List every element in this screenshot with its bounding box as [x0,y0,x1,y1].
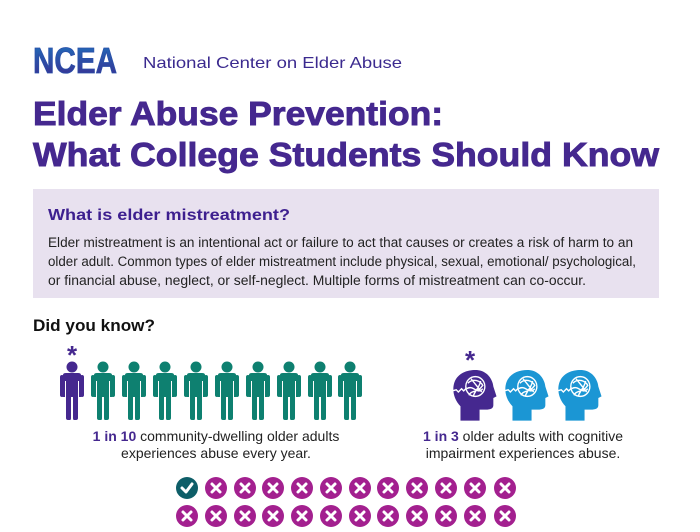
chart: 1 in 10 people icons [60,340,362,420]
logo: NCEA: NCEA [33,40,117,81]
stat text: 1 in 3: 1 in 3 older adults with cognitive [423,428,623,444]
panel: what is elder mistreatment [33,189,659,298]
stat text: 1 in 10: experiences abuse every year. [121,445,311,461]
stat text: 1 in 3: impairment experiences abuse. [426,445,620,461]
stat text: 1 in 10 [93,428,339,461]
organization name: National Center on Elder Abuse [143,55,402,72]
panel heading: What is elder mistreatment? [48,207,290,224]
panel body text: or financial abuse, neglect, or self-neglect. Multiple forms of mistreatment can co-occur. [48,273,586,288]
stat text: 1 in 3 [423,428,623,461]
panel body text: Elder mistreatment is an intentional act or failure to act that causes or creates a risk of harm to an [48,235,633,250]
title: What College Students Should Know [33,136,659,173]
title: Elder Abuse Prevention: [33,95,443,132]
heading: did you know: Did you know? [33,316,155,335]
asterisk: * [67,340,78,370]
asterisk: * [465,345,476,375]
stat text: 1 in 10: 1 in 10 community-dwelling older adults [93,428,339,444]
chart: 1 in 3 heads [452,345,602,421]
title [33,95,659,173]
panel body text [48,235,636,288]
panel body text: older adult. Common types of elder mistreatment include physical, sexual, emotional/ psychological, [48,254,636,269]
chart: check and cross circles [176,477,516,527]
